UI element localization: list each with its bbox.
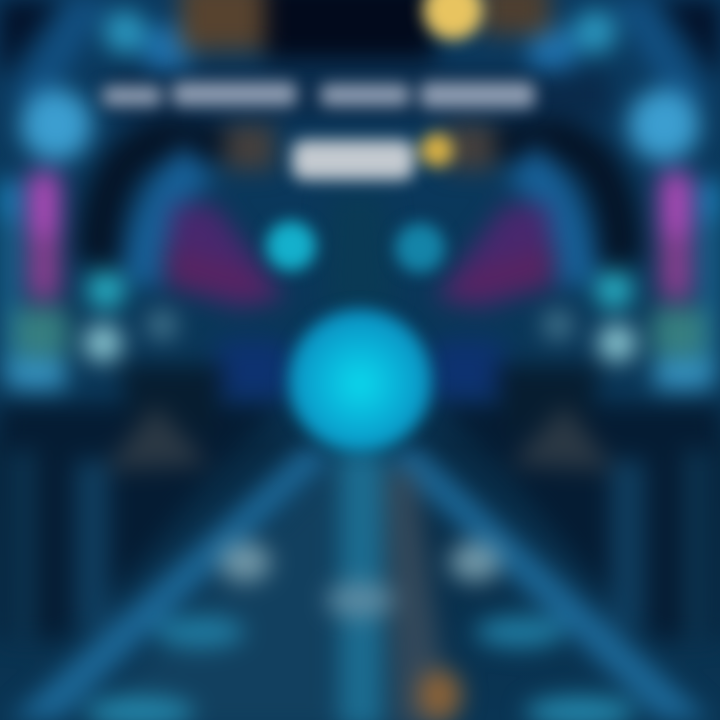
floor wedge: [80, 460, 335, 720]
title line one as soft blocks: [102, 82, 535, 108]
top dark centre: [265, 0, 435, 60]
right side scenery mirrored: [385, 0, 720, 720]
centre floor band: [338, 450, 384, 720]
brown floor band: [385, 470, 450, 720]
yellow accent dot: [420, 133, 454, 167]
cyan blob right: [395, 223, 445, 273]
brown mid patches: [225, 125, 275, 170]
dark title band: [110, 70, 610, 120]
cyan blob left: [266, 221, 316, 271]
centre dark column: [325, 195, 395, 310]
grey centre blob: [326, 582, 394, 618]
top brown columns: [180, 0, 265, 50]
yellow sun: [423, 0, 483, 40]
orange floor spot: [418, 669, 462, 720]
soft foreground layer: [102, 0, 535, 453]
title line two as soft block: [292, 140, 414, 180]
central orb: [288, 309, 432, 453]
left side scenery: [0, 0, 335, 720]
